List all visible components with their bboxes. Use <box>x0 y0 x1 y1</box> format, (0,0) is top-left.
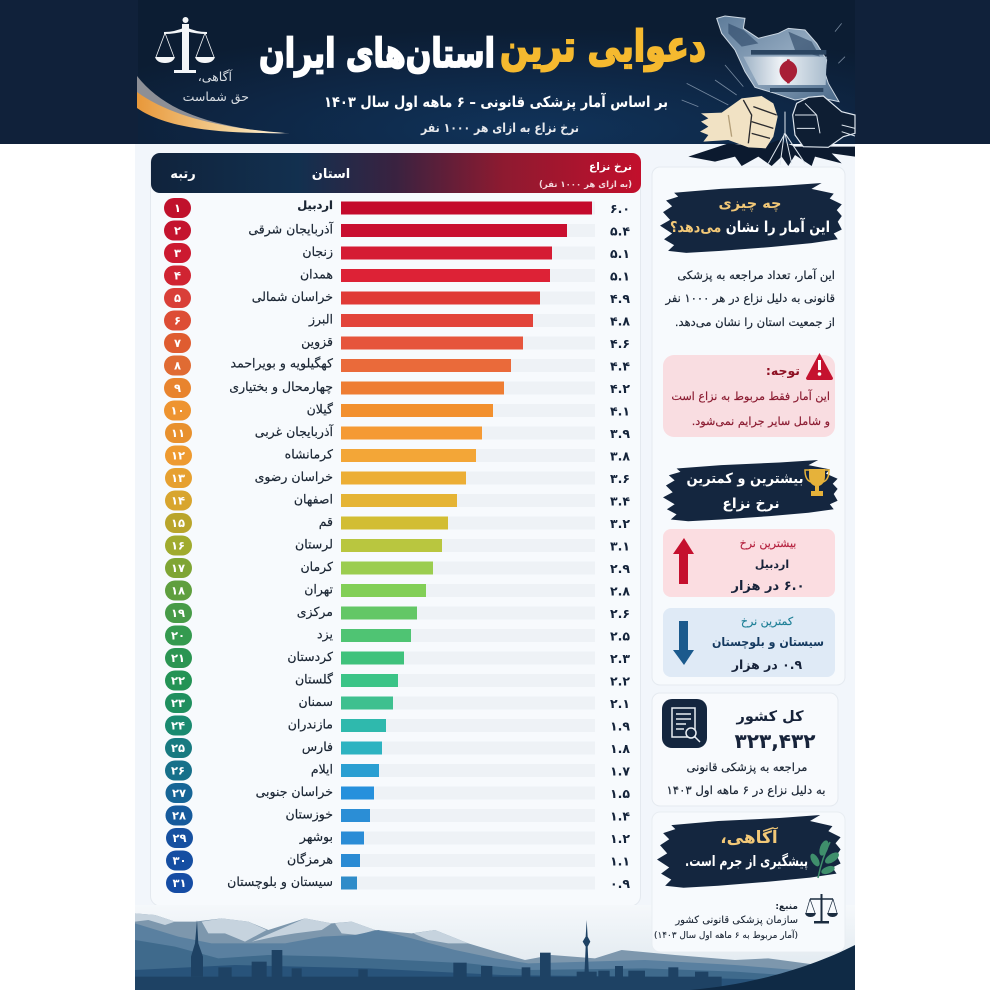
row 23 <box>165 693 630 713</box>
row 14: ۱۴ <box>171 494 185 508</box>
illustration: Iran map and fists <box>682 16 855 166</box>
row 28: خوزستان <box>286 806 333 822</box>
panel: national total: به دلیل نزاع در ۶ ماهه اول ۱۴۰۳ <box>666 783 826 798</box>
row 18: تهران <box>304 582 334 598</box>
lowest rate box: کمترین نرخ <box>741 615 794 628</box>
row 27: خراسان جنوبی <box>256 784 333 800</box>
row 9: چهارمحال و بختیاری <box>229 379 333 395</box>
row 7: ۴.۶ <box>610 336 630 351</box>
row 29: ۱.۲ <box>610 831 630 846</box>
row 21: ۲۱ <box>171 651 185 665</box>
row 4: همدان <box>300 266 333 282</box>
row 13: ۱۳ <box>171 471 185 485</box>
row 31: ۳۱ <box>172 876 187 890</box>
row 17: ۱۷ <box>171 561 185 575</box>
row 9 <box>164 378 630 398</box>
row 1 <box>164 198 630 218</box>
row 26 <box>165 760 630 780</box>
brush heading: highest and lowest: بیشترین و کمترین <box>686 471 804 487</box>
row 22: ۲۲ <box>171 674 185 688</box>
row 11: ۳.۹ <box>610 426 630 441</box>
icon: leaf sprig <box>808 839 841 878</box>
row 28: ۲۸ <box>172 808 186 822</box>
callout: note: توجه: <box>766 363 800 378</box>
row 5 <box>164 288 630 308</box>
title: استان‌های ایران <box>259 31 495 77</box>
row 25: ۱.۸ <box>610 741 630 756</box>
top dark band <box>0 0 990 144</box>
row 18 <box>165 580 630 600</box>
callout: note: و شامل سایر جرایم نمی‌شود. <box>692 415 830 429</box>
row 30: ۱.۱ <box>610 854 630 868</box>
row 6: ۶ <box>174 314 181 328</box>
panel: national total: ۳۲۳,۴۳۲ <box>734 729 816 753</box>
row 26: ایلام <box>311 762 333 776</box>
row 12: کرمانشاه <box>285 446 333 462</box>
brush banner: awareness: آگاهی، <box>720 826 779 848</box>
row 1: ۱ <box>174 201 181 215</box>
row 10 <box>164 400 630 420</box>
row 16: لرستان <box>295 536 333 552</box>
icon: trophy <box>805 469 829 496</box>
row 29 <box>166 828 630 848</box>
highest rate box <box>663 529 835 597</box>
explanation text <box>665 268 835 330</box>
row 3: ۵.۱ <box>610 246 630 261</box>
row 9: ۴.۲ <box>610 381 630 396</box>
row 12: ۱۲ <box>171 448 185 462</box>
tagline: حق شماست <box>183 89 249 105</box>
row 25: ۲۵ <box>171 741 185 755</box>
table header: استان <box>312 167 350 182</box>
row 16: ۳.۱ <box>610 538 630 554</box>
highest rate box: ۶.۰ در هزار <box>730 579 805 594</box>
row 31: سیستان و بلوچستان <box>227 874 333 890</box>
table header <box>151 153 641 193</box>
row 11 <box>165 423 630 443</box>
row 21 <box>165 648 630 668</box>
row 22 <box>165 670 630 690</box>
row 7: قزوین <box>301 334 333 350</box>
row 19: ۲.۶ <box>610 606 630 621</box>
row 14 <box>165 490 630 510</box>
row 24: ۲۴ <box>171 718 185 732</box>
light rays <box>682 23 845 107</box>
subtitle line two: نرخ نزاع به ازای هر ۱۰۰۰ نفر <box>420 120 579 135</box>
table header: رتبه <box>170 167 196 182</box>
row 15 <box>165 513 630 533</box>
main page background <box>135 144 855 990</box>
row 18: ۲.۸ <box>610 584 630 598</box>
icon: document with magnifier <box>662 699 707 748</box>
icon: blue down arrow <box>673 621 694 665</box>
row 22: ۲.۲ <box>610 674 630 688</box>
skyline footer <box>135 905 855 990</box>
row 5: خراسان شمالی <box>252 289 333 305</box>
row 30: ۳۰ <box>172 854 187 868</box>
explanation text: این آمار، تعداد مراجعه به پزشکی <box>677 268 835 283</box>
row 29: ۲۹ <box>172 831 187 845</box>
row 12 <box>165 446 630 466</box>
row 31: ۰.۹ <box>610 876 630 891</box>
row 19 <box>165 603 630 623</box>
row 24: ۱.۹ <box>610 718 630 734</box>
left fist <box>700 96 778 148</box>
row 25 <box>165 738 630 758</box>
table header: نرخ نزاع <box>589 161 632 173</box>
tagline: آگاهی، <box>198 69 233 84</box>
row 8: ۸ <box>174 358 181 372</box>
source text: منبع: <box>775 902 798 912</box>
row 1: ۶.۰ <box>610 201 630 216</box>
swoosh decoration <box>137 76 290 134</box>
row 30: هرمزگان <box>287 852 333 868</box>
callout: note <box>663 353 835 437</box>
highest rate box: بیشترین نرخ <box>740 537 796 550</box>
row 24 <box>165 716 630 736</box>
title <box>259 22 706 77</box>
row 6 <box>164 310 630 330</box>
row 13: خراسان رضوی <box>255 469 333 485</box>
row 14: اصفهان <box>294 492 333 508</box>
right fist <box>793 96 855 147</box>
row 20 <box>165 626 630 646</box>
row 5: ۵ <box>174 291 181 305</box>
icon: scales of justice <box>155 17 215 73</box>
row 27: ۲۷ <box>172 786 186 800</box>
brush heading: highest and lowest <box>663 460 838 521</box>
icon: warning triangle <box>806 353 833 380</box>
brush heading <box>660 183 842 253</box>
source text: (آمار مربوط به ۶ ماهه اول سال ۱۴۰۳) <box>654 929 798 941</box>
row 17: کرمان <box>300 559 333 575</box>
row 27: ۱.۵ <box>610 786 630 801</box>
row 4: ۴ <box>174 268 181 282</box>
row 30 <box>166 850 630 870</box>
row 2: آذربایجان شرقی <box>248 222 334 238</box>
lowest rate box: سیستان و بلوچستان <box>712 635 824 650</box>
icon: red up arrow <box>673 538 694 584</box>
row 23: سمنان <box>299 694 333 709</box>
row 16: ۱۶ <box>171 538 185 552</box>
row 28: ۱.۴ <box>610 808 630 824</box>
table header: (به ازای هر ۱۰۰۰ نفر) <box>539 180 632 190</box>
row 5: ۴.۹ <box>610 291 630 306</box>
brush heading: این آمار را نشان می‌دهد؟ <box>670 218 830 236</box>
row 8 <box>164 356 630 376</box>
row 8: ۴.۴ <box>610 358 630 374</box>
row 23: ۲.۱ <box>610 696 630 711</box>
row 17: ۲.۹ <box>610 561 630 576</box>
row 20: ۲۰ <box>171 628 185 642</box>
row 21: ۲.۳ <box>610 651 630 666</box>
explanation text: از جمعیت استان را نشان می‌دهد. <box>675 315 835 330</box>
brush banner: awareness <box>657 815 841 888</box>
row 2: ۲ <box>174 224 181 238</box>
row 27 <box>166 783 630 803</box>
brush heading: highest and lowest: نرخ نزاع <box>722 496 780 512</box>
source text: سازمان پزشکی قانونی کشور <box>674 915 798 926</box>
row 2 <box>164 220 630 240</box>
row 7: ۷ <box>174 336 181 350</box>
row 6: البرز <box>308 312 333 328</box>
row 15: ۳.۲ <box>610 516 630 531</box>
panel: national total: مراجعه به پزشکی قانونی <box>687 760 807 775</box>
row 7 <box>164 333 630 353</box>
callout: note: این آمار فقط مربوط به نزاع است <box>671 389 830 404</box>
panel: national total: کل کشور <box>735 709 804 725</box>
row 11: ۱۱ <box>171 426 185 440</box>
header panel <box>137 0 855 144</box>
lowest rate box <box>663 608 835 677</box>
row 3: زنجان <box>302 244 333 260</box>
row 25: فارس <box>302 739 333 755</box>
row 1: اردبیل <box>297 198 333 212</box>
row 16 <box>165 536 630 556</box>
row 18: ۱۸ <box>171 584 185 598</box>
row 26: ۱.۷ <box>610 764 630 778</box>
lowest rate box: ۰.۹ در هزار <box>731 657 802 672</box>
panel: what the statistic shows <box>652 167 845 685</box>
row 2: ۵.۴ <box>610 224 630 238</box>
row 6: ۴.۸ <box>610 314 630 328</box>
row 20: یزد <box>317 626 334 642</box>
snow patches <box>135 913 468 943</box>
row 10: گیلان <box>307 402 333 416</box>
row 17 <box>165 558 630 578</box>
row 12: ۳.۸ <box>610 448 630 464</box>
crack <box>768 112 805 165</box>
row 11: آذربایجان غربی <box>255 424 334 440</box>
row 15: قم <box>319 514 333 530</box>
icon: dark scales <box>805 894 838 924</box>
row 22: گلستان <box>295 672 333 686</box>
row 3: ۳ <box>174 246 181 260</box>
highest rate box: اردبیل <box>755 558 789 571</box>
row 10: ۴.۱ <box>610 404 630 418</box>
row 3 <box>164 243 630 263</box>
row 21: کردستان <box>287 649 333 665</box>
subtitle: بر اساس آمار پزشکی قانونی – ۶ ماهه اول سال ۱۴۰۳ <box>324 93 668 112</box>
row 28 <box>166 806 630 826</box>
row 24: مازندران <box>288 716 333 732</box>
row 19: ۱۹ <box>171 606 185 620</box>
row 31 <box>166 873 630 893</box>
row 4 <box>164 266 630 286</box>
row 13: ۳.۶ <box>610 471 630 486</box>
title: دعوایی ترین <box>500 22 706 72</box>
row 10: ۱۰ <box>170 404 185 418</box>
burst shadow <box>688 140 855 166</box>
row 20: ۲.۵ <box>610 628 630 644</box>
brush heading: چه چیزی <box>719 196 781 212</box>
row 26: ۲۶ <box>171 764 185 778</box>
panel: awareness and source <box>652 812 845 952</box>
row 4: ۵.۱ <box>610 268 630 284</box>
tagline <box>183 69 249 105</box>
brush banner: awareness: پیشگیری از جرم است. <box>685 852 808 870</box>
dark wave corner <box>690 945 855 990</box>
building silhouettes <box>135 920 722 990</box>
row 23: ۲۳ <box>171 696 185 710</box>
row 9: ۹ <box>174 381 181 395</box>
panel: province ranking table <box>150 153 641 906</box>
source text <box>654 902 798 941</box>
row 14: ۳.۴ <box>610 494 630 508</box>
row 19: مرکزی <box>297 604 333 620</box>
map of Iran <box>717 16 839 102</box>
row 13 <box>165 468 630 488</box>
row 15: ۱۵ <box>171 516 185 530</box>
row 8: کهگیلویه و بویراحمد <box>231 356 333 372</box>
row 29: بوشهر <box>299 829 333 845</box>
explanation text: قانونی به دلیل نزاع در هر ۱۰۰۰ نفر <box>665 291 835 306</box>
panel: national total <box>652 693 838 806</box>
